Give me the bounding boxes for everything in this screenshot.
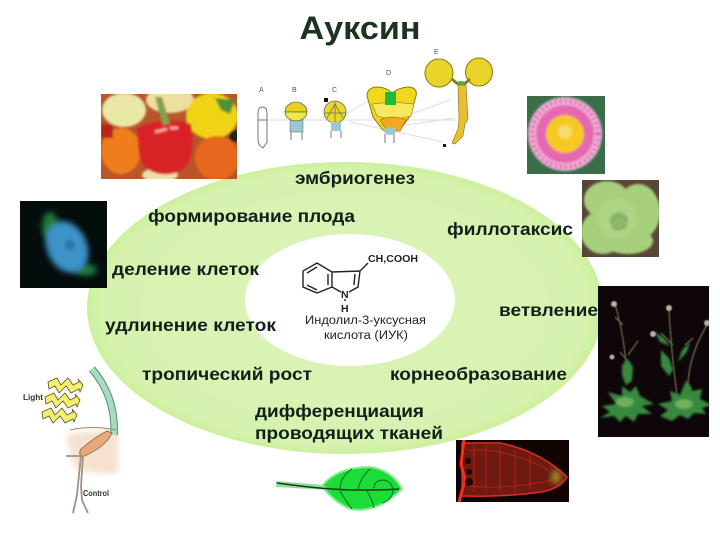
label: phyllotaxis: филлотаксис [447, 219, 573, 239]
stage A [258, 87, 267, 148]
stage B: B [292, 87, 297, 94]
label: branching: ветвление [499, 300, 598, 320]
stage E [425, 49, 492, 147]
label: Control: Control [83, 489, 109, 498]
green ring background [87, 162, 603, 454]
auxin structural formula: CH,COOH [368, 254, 418, 265]
label: tropic growth: тропический рост [142, 364, 312, 384]
photo: red root tip [456, 440, 569, 502]
label: fruit formation: формирование плода [148, 206, 355, 226]
label: vascular tissue differentiation: проводящих тканей [255, 423, 443, 443]
embryogenesis diagram [258, 49, 492, 148]
stage A: A [259, 87, 264, 94]
auxin structural formula: H [341, 303, 349, 315]
label: vascular tissue differentiation: дифференциация [255, 401, 424, 421]
label: embryogenesis: эмбриогенез [295, 168, 415, 188]
formula caption: Индолил-3-уксусная [305, 315, 426, 327]
label: root formation: корнеобразование [390, 364, 567, 384]
photo: branching arabidopsis [598, 286, 712, 437]
auxin structural formula: N [341, 289, 349, 301]
label: cell division: деление клеток [112, 259, 259, 279]
formula caption [305, 315, 426, 342]
auxin structural formula [303, 254, 418, 315]
label: cell elongation: удлинение клеток [105, 315, 276, 335]
illustration: phototropism seedling [23, 369, 118, 513]
stage D: D [386, 70, 391, 77]
formula caption: кислота (ИУК) [324, 330, 408, 342]
label: Light: Light [23, 392, 43, 402]
stage D [367, 70, 416, 143]
stage B [285, 87, 307, 140]
inner white ellipse [245, 234, 455, 366]
stage E: E [434, 49, 439, 56]
illustration: green leaf with veins [276, 467, 402, 510]
title: Ауксин [300, 10, 420, 46]
photo: flower [527, 96, 605, 174]
photo: cell division [20, 201, 107, 288]
label: vascular tissue differentiation [255, 401, 443, 443]
stage C [324, 87, 346, 138]
light arrows [42, 378, 83, 423]
photo: rosette phyllotaxis [581, 180, 660, 257]
photo: peppers [101, 94, 237, 179]
stage C: C [332, 87, 337, 94]
